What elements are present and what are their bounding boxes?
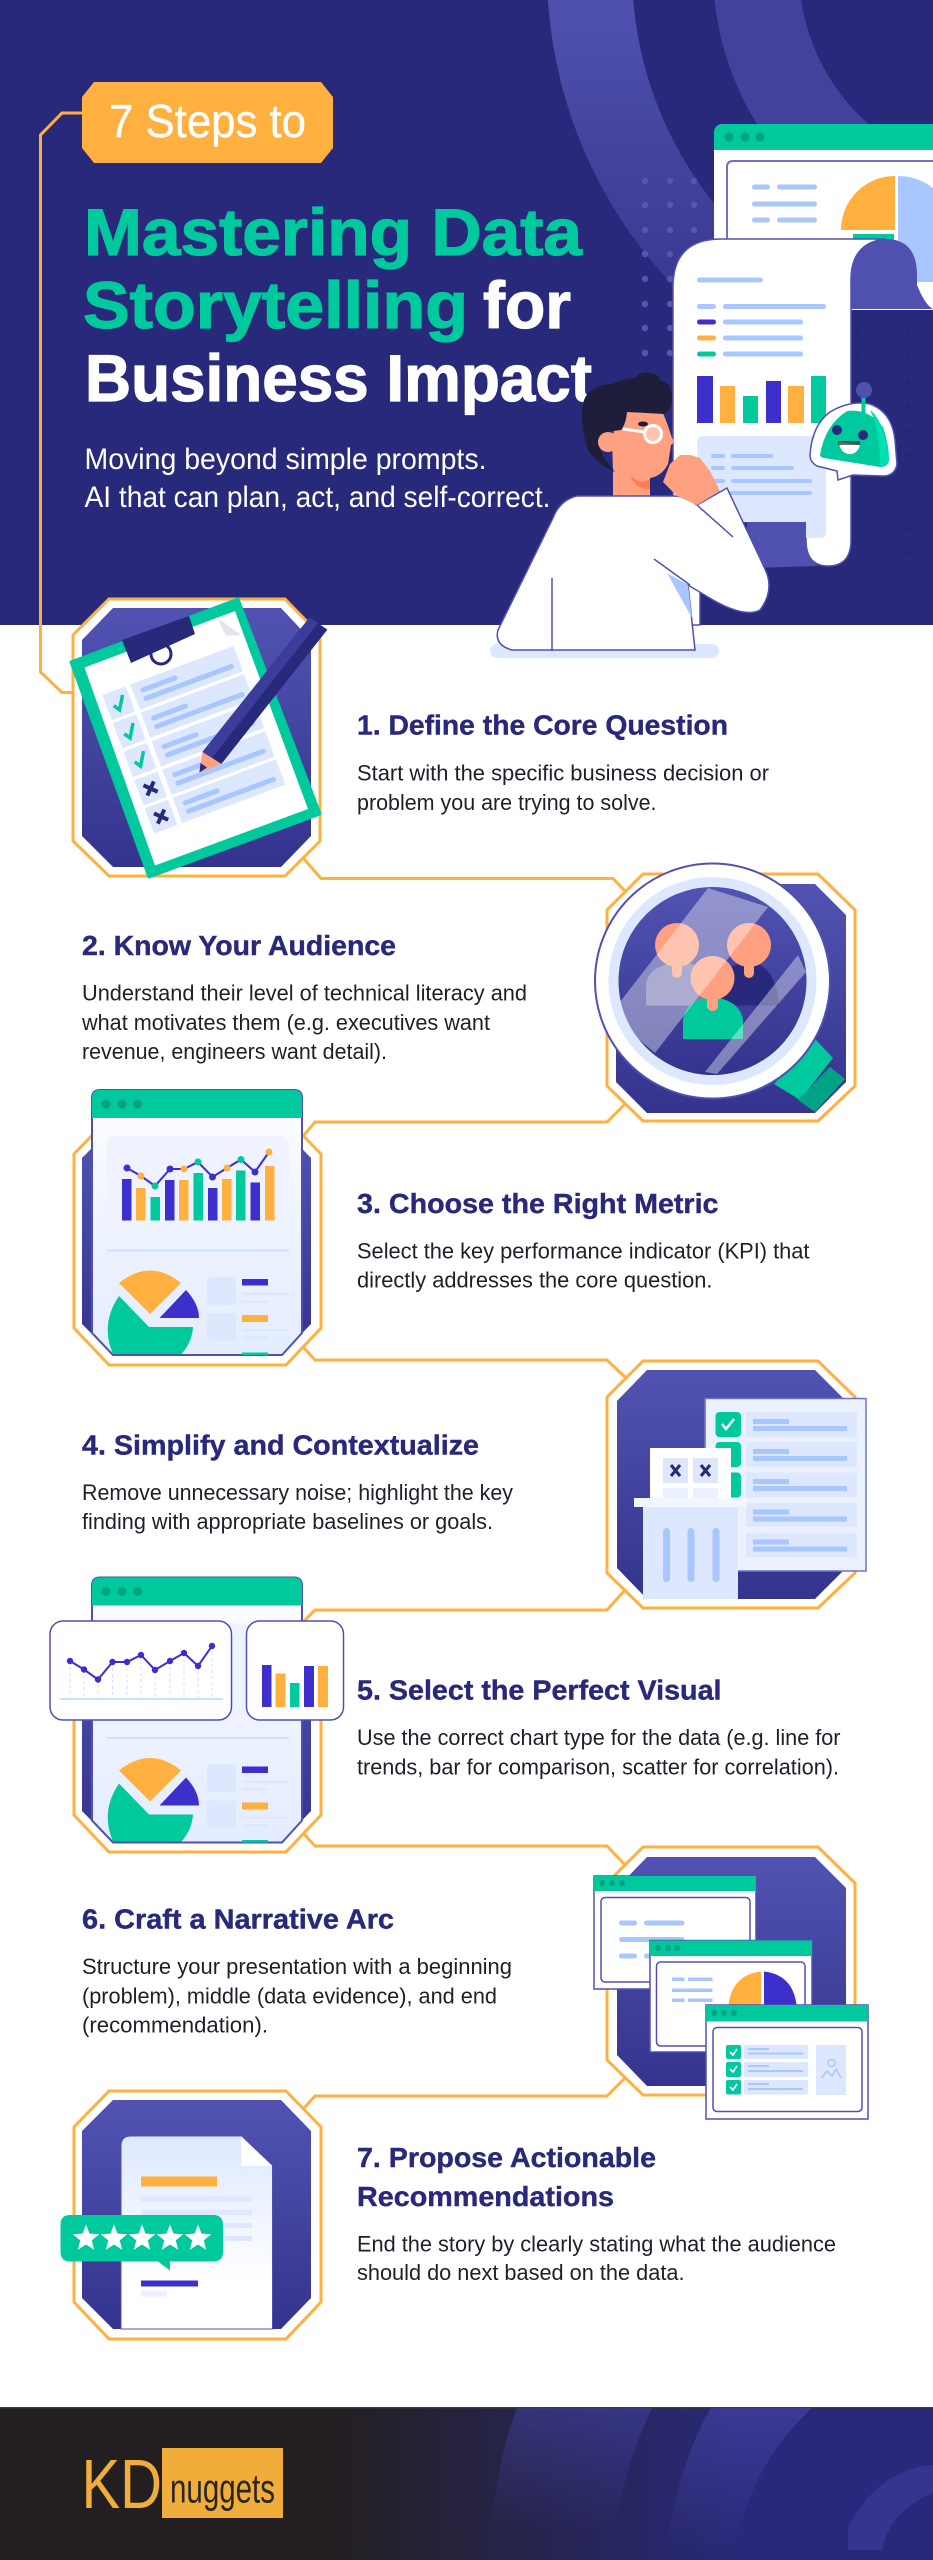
subtitle: AI that can plan, act, and self-correct. (84, 481, 550, 514)
icon: dashboard window (92, 1578, 302, 1842)
title: Business Impact (85, 341, 592, 415)
connector: step 2 to 3 (304, 1104, 625, 1135)
subtitle (84, 443, 550, 514)
illustration: robot bubble (810, 382, 897, 480)
connector: step 1 to 2 (304, 859, 625, 891)
connector: badge to step 1 (40, 113, 82, 692)
description: (recommendation). (82, 2012, 268, 2038)
heading: 7. Propose Actionable (357, 2142, 656, 2173)
frame (74, 2091, 321, 2339)
title: Mastering Data (84, 195, 583, 269)
description: (problem), middle (data evidence), and end (82, 1984, 497, 2008)
icon: clipboard checklist (71, 599, 320, 877)
heading: Recommendations (357, 2181, 614, 2212)
step 1 (71, 599, 769, 877)
card: line chart (50, 1621, 232, 1720)
heading: 1. Define the Core Question (357, 710, 728, 740)
logo: KDnuggets: nuggets (170, 2466, 275, 2512)
heading: 5. Select the Perfect Visual (357, 1674, 722, 1706)
icon: window A (594, 1876, 756, 1989)
heading: 4. Simplify and Contextualize (82, 1430, 479, 1460)
connector: step 6 to 7 (304, 2078, 625, 2108)
icon: document (121, 2136, 272, 2329)
description: trends, bar for comparison, scatter for correlation). (357, 1754, 839, 1780)
step 2 (81, 864, 855, 1121)
icon: checklist document and trash bin (634, 1398, 866, 1599)
heading (357, 2142, 656, 2212)
description: Structure your presentation with a beginning (82, 1954, 512, 1979)
illustration: dashboard window (714, 124, 933, 310)
description: should do next based on the data. (357, 2260, 684, 2285)
description: what motivates them (e.g. executives want (81, 1010, 491, 1035)
illustration: paper scroll (673, 239, 933, 625)
icon: pencil (199, 618, 327, 772)
frame (74, 1605, 321, 1852)
header background (0, 0, 933, 625)
heading: 3. Choose the Right Metric (357, 1188, 718, 1219)
connector: step 4 to 5 (304, 1590, 625, 1621)
badge: 7 Steps to: 7 Steps to (109, 95, 306, 147)
description (82, 1480, 514, 1534)
description: problem you are trying to solve. (357, 790, 656, 815)
title (83, 195, 592, 415)
description: finding with appropriate baselines or goals. (82, 1509, 493, 1534)
step 6 (82, 1847, 868, 2119)
description (81, 980, 527, 1064)
description: Select the key performance indicator (KPI) that (357, 1238, 810, 1264)
description: Remove unnecessary noise; highlight the key (82, 1480, 514, 1505)
description: Start with the specific business decision or (357, 760, 769, 786)
description: Use the correct chart type for the data (e.g. line for (357, 1725, 841, 1750)
frame (607, 1361, 855, 1608)
description: directly addresses the core question. (357, 1268, 712, 1292)
frame (607, 874, 855, 1121)
icon: five star rating bubble (60, 2215, 223, 2270)
card: bar chart (246, 1621, 344, 1720)
step 3 (74, 1090, 810, 1365)
icon: metrics dashboard (92, 1090, 302, 1355)
logo: KDnuggets: KD (82, 2445, 162, 2523)
logo: KDnuggets (82, 2445, 283, 2523)
description (82, 1954, 512, 2038)
step 4 (82, 1361, 866, 1608)
illustration: thinking person (490, 373, 769, 658)
title: Storytelling (83, 268, 468, 342)
badge: 7 Steps to (82, 82, 333, 163)
icon: magnifier with audience (595, 864, 845, 1112)
description (357, 1238, 810, 1292)
gap panel between cards (231, 1624, 247, 1722)
description: End the story by clearly stating what the audience (357, 2232, 836, 2256)
heading: 6. Craft a Narrative Arc (82, 1904, 394, 1934)
description (357, 1725, 841, 1780)
step 5 (50, 1578, 841, 1852)
footer (0, 2407, 933, 2560)
connector: step 5 to 6 (304, 1834, 625, 1865)
heading: 2. Know Your Audience (82, 930, 396, 961)
subtitle: Moving beyond simple prompts. (84, 443, 486, 476)
description (357, 760, 769, 815)
description: Understand their level of technical literacy and (82, 980, 527, 1006)
icon: window C (706, 2005, 868, 2119)
icon: window B (650, 1940, 812, 2052)
frame (607, 1847, 855, 2095)
title: for (483, 268, 571, 342)
frame (74, 1118, 321, 1365)
description (357, 2232, 836, 2285)
step 7 (60, 2091, 836, 2339)
connector: step 3 to 4 (304, 1348, 625, 1377)
frame (73, 599, 320, 876)
description: revenue, engineers want detail). (82, 1039, 387, 1064)
